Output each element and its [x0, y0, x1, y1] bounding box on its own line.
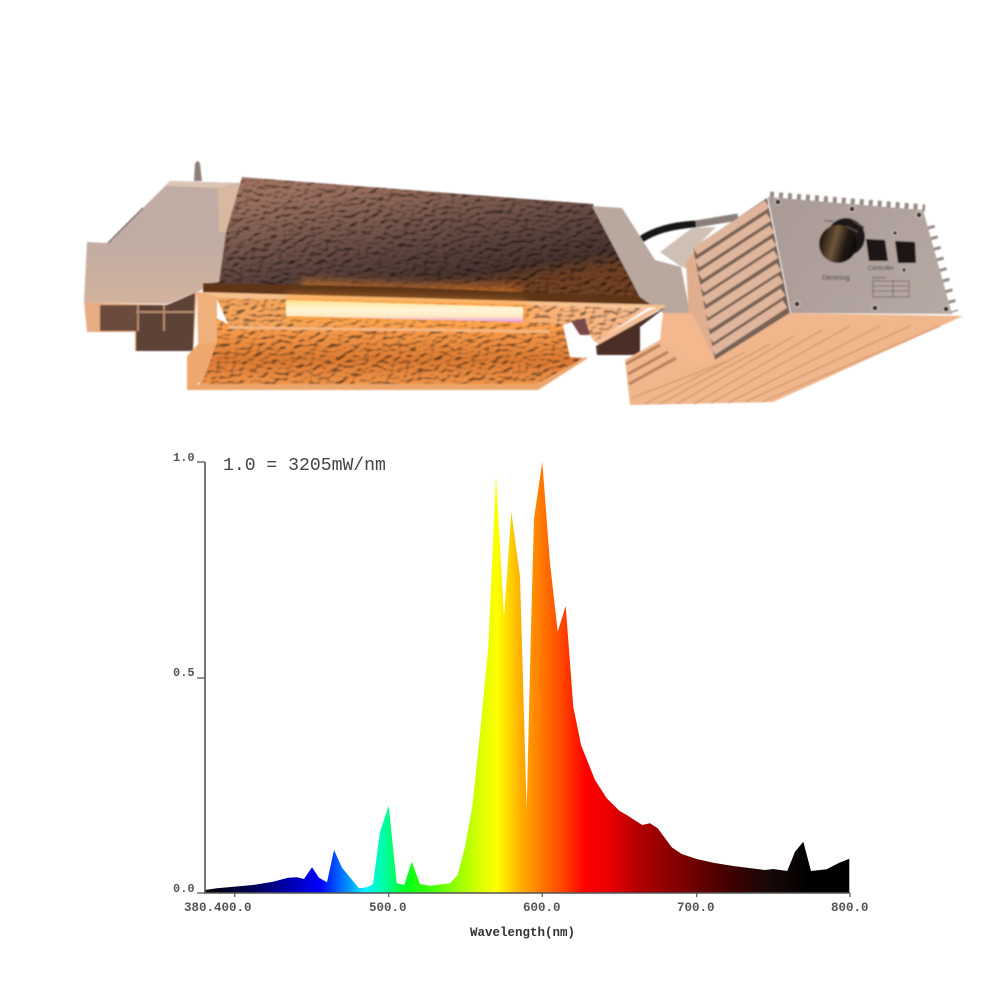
y axis labels: 0.0	[173, 882, 195, 896]
hammered hood	[203, 177, 666, 300]
x axis labels: 500.0	[369, 901, 407, 915]
ballast control panel: Controller	[868, 266, 894, 272]
ballast control panel	[768, 197, 952, 314]
axes and ticks	[197, 462, 850, 897]
spectrum area	[205, 462, 849, 893]
spectrum chart	[173, 451, 869, 940]
upper inner reflector	[216, 297, 648, 342]
ballast side fins	[693, 198, 790, 360]
ballast heat-sink teeth	[770, 195, 954, 312]
hood side bracket	[592, 206, 690, 313]
hood lower dark lip	[203, 283, 667, 305]
x axis labels: 800.0	[831, 901, 869, 915]
dimming knob	[819, 218, 865, 263]
y axis labels: 0.5	[173, 666, 195, 680]
panel labels: Dimming	[822, 275, 850, 282]
lamp glow	[286, 296, 526, 324]
hanging hook	[194, 161, 202, 181]
lamp tube	[286, 300, 523, 322]
lamp fixture photo	[84, 161, 963, 405]
controller sockets	[866, 239, 888, 261]
x axis labels: 380.400.0	[184, 901, 252, 915]
panel screws	[775, 199, 949, 312]
x axis title: Wavelength(nm)	[470, 926, 575, 940]
scale note: 1.0 = 3205mW/nm	[223, 456, 386, 476]
y axis labels	[173, 451, 195, 896]
ballast control panel: Power	[824, 219, 835, 223]
x axis labels: 700.0	[677, 901, 715, 915]
fin-to-bracket filler	[686, 250, 717, 362]
lower hammered reflector	[200, 318, 585, 388]
ballast control panel: OUTPUT	[872, 276, 887, 280]
reflector frame	[187, 292, 665, 390]
x axis labels	[184, 901, 869, 915]
ballast bottom	[625, 313, 963, 405]
y axis labels: 1.0	[173, 451, 195, 465]
right dark bracket	[596, 307, 666, 355]
left end box	[84, 181, 240, 351]
hood under-glow	[300, 281, 520, 296]
white notch	[563, 325, 595, 358]
rating table	[873, 281, 909, 297]
cable	[640, 224, 696, 240]
x axis labels: 600.0	[523, 901, 561, 915]
